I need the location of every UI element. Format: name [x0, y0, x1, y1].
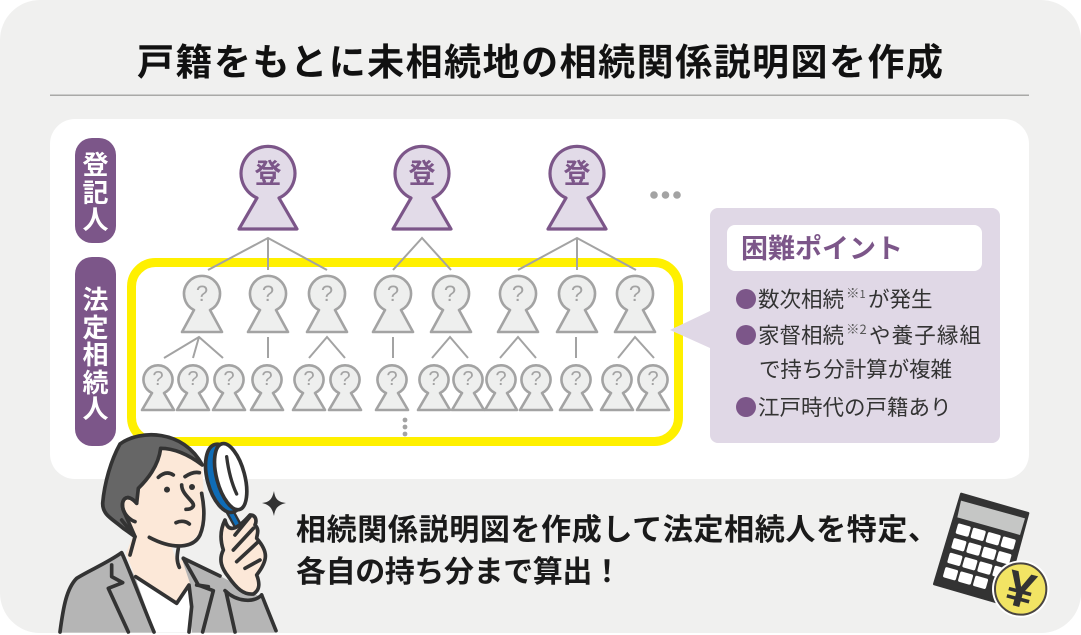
- label: registered person: [75, 138, 116, 243]
- heirs: second generation: ?: [611, 368, 623, 390]
- label: legal heirs: 定: [82, 308, 109, 345]
- hair: [103, 435, 202, 537]
- label: registered person: 記: [82, 173, 109, 210]
- registered persons: [239, 146, 681, 229]
- panel: diagram: [50, 119, 1029, 479]
- heirs: second generation: ?: [428, 368, 440, 390]
- calculator screen: [957, 501, 1025, 535]
- bullet list: [736, 282, 981, 422]
- handle: [230, 512, 238, 527]
- person: registrant 3: 登: [564, 152, 590, 191]
- callout: difficulty points: [670, 208, 1000, 443]
- heirs: second generation: ?: [261, 368, 273, 390]
- bullet list: で持ち分計算が複雑: [759, 353, 952, 384]
- title: 戸籍をもとに未相続地の相続関係説明図を作成: [137, 32, 943, 86]
- person: registrant 2: [393, 146, 451, 229]
- heirs: second generation: [142, 365, 669, 410]
- icon: man with magnifying glass: [60, 435, 277, 633]
- heirs: second generation: ?: [339, 368, 351, 390]
- heirs: second generation: ?: [530, 368, 542, 390]
- heirs: first generation: ?: [444, 281, 456, 306]
- hand: [221, 515, 265, 594]
- heirs: first generation: ?: [196, 281, 208, 306]
- vertical ellipsis: [403, 418, 407, 436]
- person: registrant 1: [239, 146, 297, 229]
- label: legal heirs: 法: [82, 280, 109, 317]
- label: legal heirs: 人: [82, 389, 109, 426]
- icon: sparkle: [262, 491, 286, 516]
- person: registrant 3: [548, 146, 606, 229]
- bullet list: ※2: [846, 318, 867, 338]
- heirs: second generation: ?: [647, 368, 659, 390]
- heirs: second generation: ?: [570, 368, 582, 390]
- summary text: 相続関係説明図を作成して法定相続人を特定、: [296, 505, 938, 549]
- bullet list: や養子縁組: [869, 319, 981, 350]
- bullet list: 数次相続: [758, 283, 844, 314]
- icon: calculator with yen coin: [934, 494, 1049, 620]
- heirs: first generation: ?: [321, 281, 333, 306]
- yen coin: ¥: [1000, 559, 1041, 620]
- person: registrant 1: 登: [254, 152, 282, 191]
- heirs: first generation: ?: [629, 281, 641, 306]
- summary text: 各自の持ち分まで算出！: [296, 547, 622, 591]
- heirs: second generation: ?: [386, 368, 398, 390]
- face and neck: [122, 448, 205, 603]
- jacket: [60, 553, 277, 633]
- bullet list: 江戸時代の戸籍あり: [758, 391, 952, 422]
- bullet list: ※1: [846, 282, 866, 302]
- heirs: second generation: ?: [223, 368, 235, 390]
- bullet list: が発生: [868, 283, 933, 314]
- label: registered person: 登: [82, 145, 109, 182]
- callout heading: 困難ポイント: [741, 227, 903, 266]
- heirs: first generation: ?: [262, 281, 274, 306]
- heirs: first generation: [182, 276, 655, 332]
- heirs: first generation: ?: [571, 281, 583, 306]
- heirs: second generation: ?: [303, 368, 315, 390]
- magnifier lens: [199, 440, 249, 516]
- shirt: [135, 577, 192, 633]
- heirs: first generation: ?: [512, 281, 524, 306]
- label: registered person: 人: [82, 200, 109, 237]
- label: legal heirs: [75, 257, 116, 446]
- yellow frame: legal heirs: [132, 262, 678, 442]
- label: legal heirs: 相: [82, 335, 109, 372]
- label: legal heirs: 続: [82, 363, 109, 400]
- family tree connector lines: [164, 238, 654, 358]
- ellipsis dots: [650, 191, 681, 199]
- outlines: [60, 472, 276, 632]
- person: registrant 2: 登: [408, 152, 436, 191]
- heirs: first generation: ?: [387, 281, 399, 306]
- heirs: second generation: ?: [495, 368, 507, 390]
- heirs: second generation: ?: [462, 368, 474, 390]
- summary text: [296, 505, 938, 591]
- callout heading: [727, 225, 982, 271]
- heirs: second generation: ?: [187, 368, 199, 390]
- heirs: second generation: ?: [152, 368, 164, 390]
- calculator body: [934, 494, 1028, 604]
- calculator keys: [943, 523, 1016, 589]
- bullet list: 家督相続: [758, 319, 844, 350]
